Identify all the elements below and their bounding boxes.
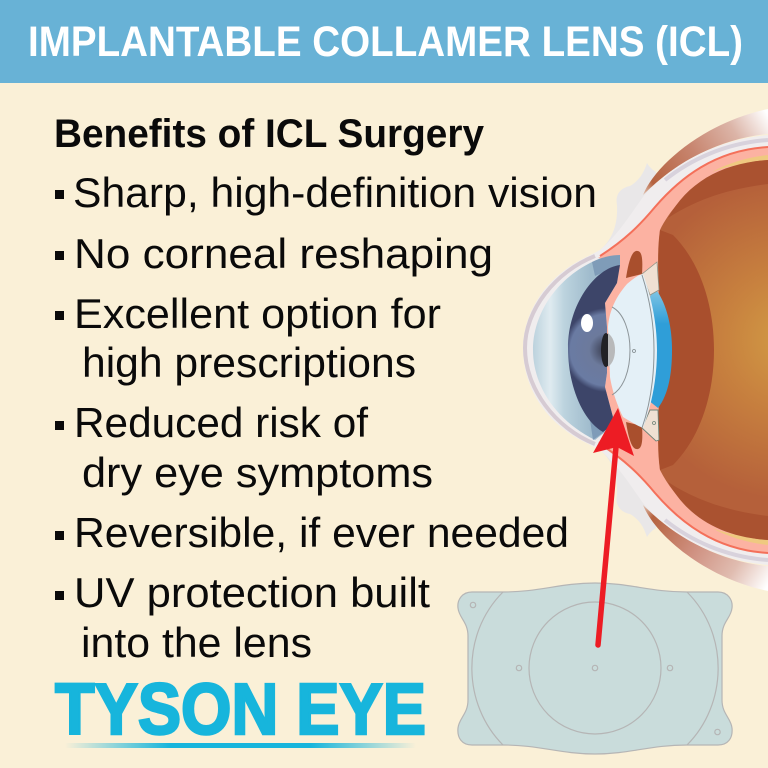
eye: upper retina band	[668, 160, 768, 218]
eye: conjunctiva bottom	[600, 450, 660, 537]
benefit: high prescriptions: high prescriptions	[82, 339, 416, 386]
eye: ciliary opening top	[626, 251, 642, 278]
eye: lilac sclera band bottom	[665, 520, 768, 560]
eye: sclera and cornea outer wall	[523, 135, 768, 565]
benefit: high prescriptions: Excellent option for	[74, 290, 441, 337]
eye: red vessel line bottom	[600, 444, 768, 553]
lens body	[458, 583, 732, 754]
left arc	[472, 592, 503, 745]
ICL lens diagram	[458, 583, 732, 754]
eye: yellow retina edge bottom	[712, 528, 768, 545]
eye: lens fold line	[642, 275, 654, 428]
eye: natural lens	[648, 288, 672, 408]
benefit: high prescriptions	[55, 290, 441, 386]
eye: muscle top	[643, 109, 768, 195]
positioning holes	[470, 602, 720, 735]
eye: pink choroid layer	[598, 147, 768, 553]
benefit: uv protection: UV protection built	[74, 569, 430, 616]
benefit: dry eye	[55, 399, 433, 496]
eye: lower retina band	[668, 482, 768, 540]
benefit: dry eye: dry eye symptoms	[82, 449, 433, 496]
optic circle	[529, 602, 661, 734]
eye: ciliary opening bottom	[626, 422, 642, 449]
title banner	[0, 0, 768, 83]
eye: muscle bottom	[643, 505, 768, 591]
eye: haptic bottom	[642, 410, 659, 441]
benefit: sharp vision: Sharp, high-definition vision	[73, 169, 597, 216]
eye: iris	[568, 265, 620, 432]
eye: pupil	[601, 333, 611, 367]
benefit: uv protection: into the lens	[81, 619, 312, 666]
benefit: no corneal reshaping: No corneal reshaping	[74, 230, 493, 277]
eye: haptic top	[642, 262, 659, 295]
eye: retina and vitreous	[658, 160, 768, 540]
eye: lens marker	[632, 350, 636, 352]
eye: dark crescent	[658, 230, 714, 470]
eye: haptic marker	[652, 422, 656, 424]
eye: implanted lens	[608, 274, 657, 428]
eye: conjunctiva top	[600, 163, 660, 250]
eye: iris highlight	[581, 314, 593, 332]
eye: optic edge	[612, 307, 630, 395]
eye: lilac sclera band top	[665, 140, 768, 180]
eye: pupil lens overlap	[608, 333, 615, 367]
eye: red vessel line top	[600, 147, 768, 256]
benefit: dry eye: Reduced risk of	[74, 399, 368, 446]
eye cross-section illustration	[523, 109, 768, 591]
eye: yellow retina edge top	[712, 155, 768, 172]
right arc	[687, 592, 718, 745]
eye: lower iris rim	[590, 420, 604, 440]
eye: lilac cornea rim	[525, 256, 595, 444]
red arrow	[593, 408, 634, 645]
logo: Tyson Eye: TYSON EYE	[55, 670, 426, 750]
eye: upper iris rim	[592, 255, 620, 276]
heading: benefits: Benefits of ICL Surgery	[54, 112, 485, 156]
eye: cornea	[533, 262, 606, 440]
benefit: uv protection	[55, 569, 430, 666]
benefit: reversible: Reversible, if ever needed	[74, 509, 569, 556]
